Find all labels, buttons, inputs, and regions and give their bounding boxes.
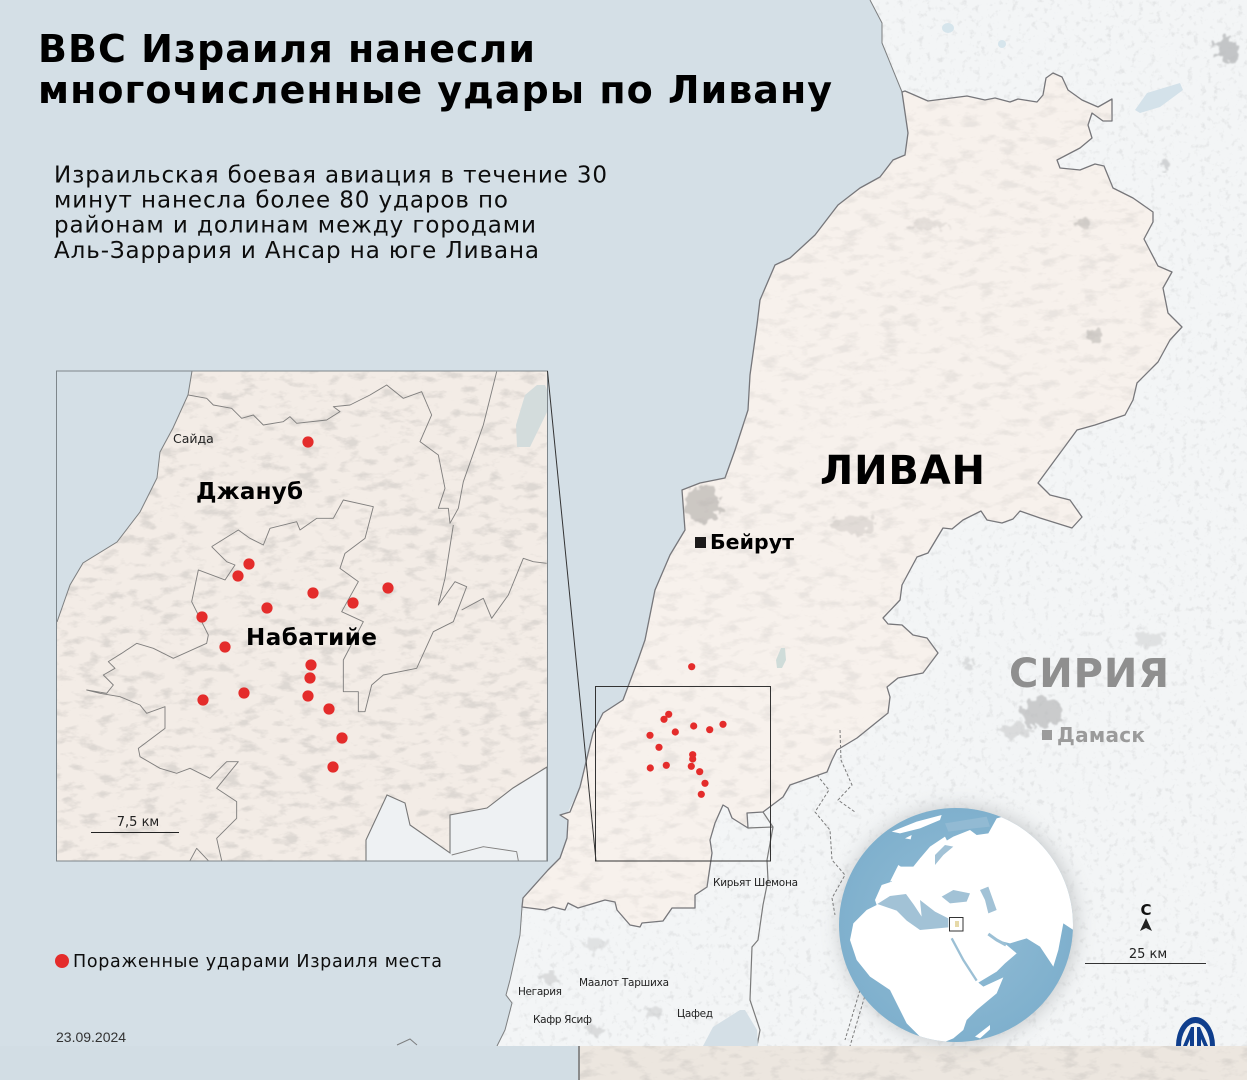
main map strike points	[646, 663, 727, 798]
inset map panel	[56, 371, 548, 861]
main scale bar: 25 км	[1129, 947, 1167, 962]
connector from locator box to inset	[548, 371, 596, 861]
description text: Аль-Заррария и Ансар на юге Ливана	[54, 238, 539, 264]
inset province borders	[87, 372, 547, 861]
inset coastline	[57, 371, 192, 622]
inset sea	[57, 371, 192, 622]
label: Бейрут with capital marker: Бейрут	[710, 530, 794, 554]
globe ocean	[839, 808, 1073, 1042]
inset strike points	[196, 436, 394, 773]
inset land	[57, 371, 547, 861]
inset terrain texture	[57, 371, 547, 861]
globe locator	[839, 806, 1093, 1047]
map: Lebanon territory	[520, 70, 1200, 930]
city labels: Маалот Таршиха	[579, 977, 669, 989]
legend: Пораженные ударами Израиля места	[73, 952, 442, 972]
inset frame	[56, 371, 548, 861]
description text: Израильская боевая авиация в течение 30	[54, 162, 607, 188]
inset label: Сайда: Сайда	[173, 431, 214, 446]
title: ВВС Израиля нанесли	[38, 27, 535, 71]
map: Israeli and Syrian coastline	[397, 0, 902, 1046]
map: sea	[0, 0, 908, 1046]
title	[38, 27, 832, 112]
city labels	[518, 877, 798, 1026]
globe location box	[950, 918, 963, 931]
AA logo	[1176, 1017, 1215, 1046]
title: многочисленные удары по Ливану	[38, 68, 832, 112]
inset Israeli territory	[366, 767, 547, 861]
date: 23.09.2024	[56, 1029, 126, 1045]
description text	[54, 162, 607, 264]
map: Golan, Jordan and Galilee borders	[748, 730, 866, 1046]
description text: минут нанесла более 80 ударов по	[54, 188, 508, 214]
city labels: Негария	[518, 986, 562, 998]
bottom strip of map	[0, 1046, 1247, 1080]
description text: районам и долинам между городами	[54, 212, 536, 238]
city labels: Кирьят Шемона	[713, 877, 798, 889]
city labels: Цафед	[677, 1008, 713, 1020]
locator box on main map	[596, 686, 770, 861]
label: СИРИЯ: СИРИЯ	[1009, 651, 1169, 697]
north arrow: С	[1140, 901, 1152, 919]
globe land and seas	[850, 815, 1073, 1042]
north arrow	[1140, 901, 1152, 931]
city labels: Кафр Ясиф	[533, 1014, 592, 1026]
label: ЛИВАН: ЛИВАН	[820, 448, 985, 494]
label: Дамаск with capital marker: Дамаск	[1057, 723, 1145, 747]
inset label: Джануб: Джануб	[196, 479, 303, 505]
inset lake	[516, 385, 548, 447]
inset scale bar	[91, 815, 179, 833]
map: lakes and city patches	[538, 23, 1239, 1046]
globe shadow	[839, 806, 1077, 1044]
inset scale bar: 7,5 км	[117, 815, 159, 830]
main scale bar	[1085, 947, 1206, 964]
inset label: Набатийе: Набатийе	[246, 625, 377, 651]
